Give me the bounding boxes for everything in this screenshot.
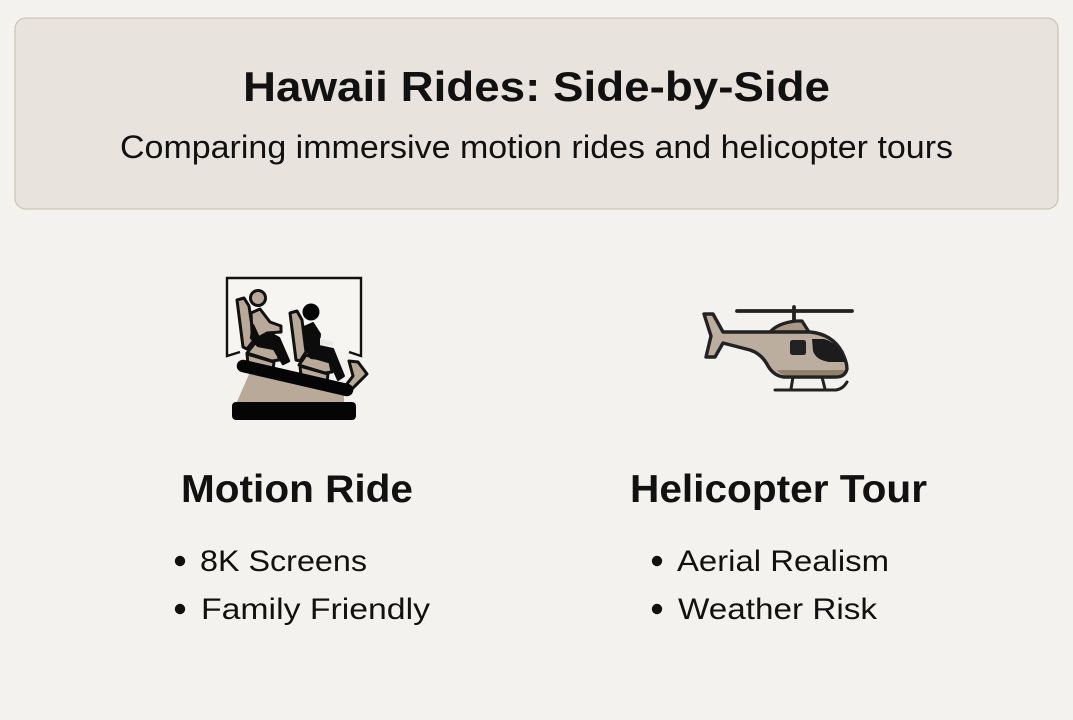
heading: helicopter tour: Helicopter Tour: [630, 468, 927, 511]
header panel: [15, 18, 1058, 209]
footrest: [343, 361, 367, 389]
cabin top: [770, 321, 809, 332]
rear rider: [250, 290, 266, 306]
list: helicopter features: Aerial Realism: [677, 545, 889, 578]
rotor: [737, 309, 852, 313]
list: helicopter features: Weather Risk: [678, 593, 878, 626]
list: motion ride features: 8K Screens: [200, 545, 367, 578]
tilting rail: [243, 366, 347, 390]
rear seat: [237, 298, 254, 349]
icon: motion ride simulator: [227, 278, 367, 420]
cockpit window: [812, 339, 846, 362]
title: Hawaii Rides: Side-by-Side: [243, 63, 830, 110]
front seat: [290, 311, 306, 361]
panel: helicopter tour: [630, 307, 927, 626]
body: [704, 314, 847, 377]
screen: [227, 278, 361, 356]
panel: motion ride: [175, 278, 430, 626]
heading: motion ride: Motion Ride: [181, 468, 413, 511]
belly shade: [777, 370, 845, 375]
subtitle: Comparing immersive motion rides and helicopter tours: [120, 129, 953, 165]
list: motion ride features: [175, 545, 430, 626]
icon: helicopter: [704, 307, 852, 390]
front rider: [302, 304, 320, 320]
list: helicopter features: [652, 545, 889, 626]
side window: [790, 340, 806, 355]
skids: [775, 377, 847, 390]
list: motion ride features: Family Friendly: [201, 593, 430, 626]
base: [236, 372, 344, 404]
